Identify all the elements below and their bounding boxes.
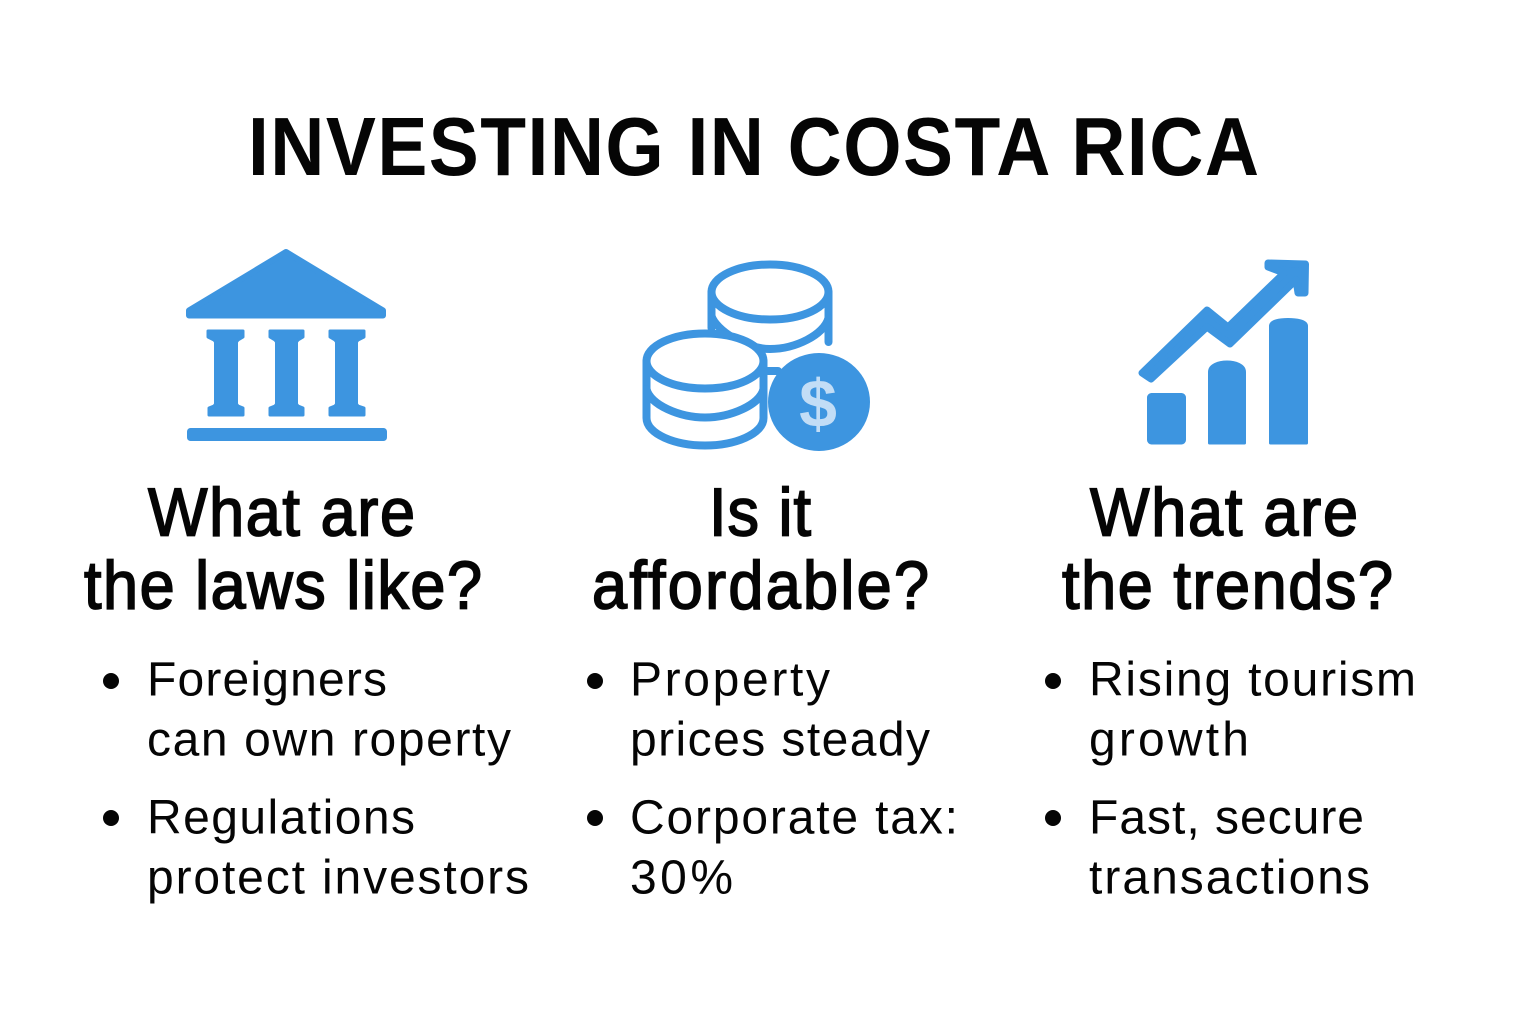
icon: coin stacks with dollar bbox=[646, 264, 870, 451]
icon: bank building bbox=[188, 252, 386, 440]
list: affordability: 30% bbox=[630, 852, 733, 904]
heading: affordability: affordable? bbox=[592, 548, 929, 623]
icon: dollar badge: $ bbox=[799, 366, 837, 442]
title: INVESTING IN COSTA RICA bbox=[248, 101, 1259, 193]
heading: laws bbox=[84, 475, 482, 623]
panel: laws bbox=[84, 252, 529, 904]
list: laws: Foreigners bbox=[147, 654, 387, 706]
heading: trends: the trends? bbox=[1062, 548, 1393, 623]
list: trends bbox=[1045, 654, 1416, 904]
heading: laws: What are bbox=[148, 475, 415, 550]
list: affordability: Corporate tax: bbox=[630, 792, 958, 844]
list: affordability bbox=[587, 654, 958, 904]
heading: affordability bbox=[592, 475, 929, 623]
list: laws: Regulations bbox=[147, 792, 415, 844]
list: laws: protect investors bbox=[147, 852, 529, 904]
list: trends: transactions bbox=[1089, 852, 1370, 904]
list: affordability: Property bbox=[630, 654, 830, 706]
heading: trends: What are bbox=[1090, 475, 1358, 550]
heading: laws: the laws like? bbox=[84, 548, 482, 623]
icon: rising bar chart with arrow bbox=[1142, 263, 1306, 443]
list: trends: Rising tourism bbox=[1089, 654, 1416, 706]
heading: trends bbox=[1062, 475, 1393, 623]
icon: dollar badge bbox=[768, 353, 870, 451]
panel: trends bbox=[1045, 263, 1416, 904]
heading: affordability: Is it bbox=[709, 475, 811, 550]
list: affordability: prices steady bbox=[630, 714, 930, 766]
panel: affordability bbox=[587, 264, 958, 904]
list: trends: growth bbox=[1089, 714, 1249, 766]
list: trends: Fast, secure bbox=[1089, 792, 1364, 844]
list: laws: can own roperty bbox=[147, 714, 511, 766]
list: laws bbox=[103, 654, 529, 904]
